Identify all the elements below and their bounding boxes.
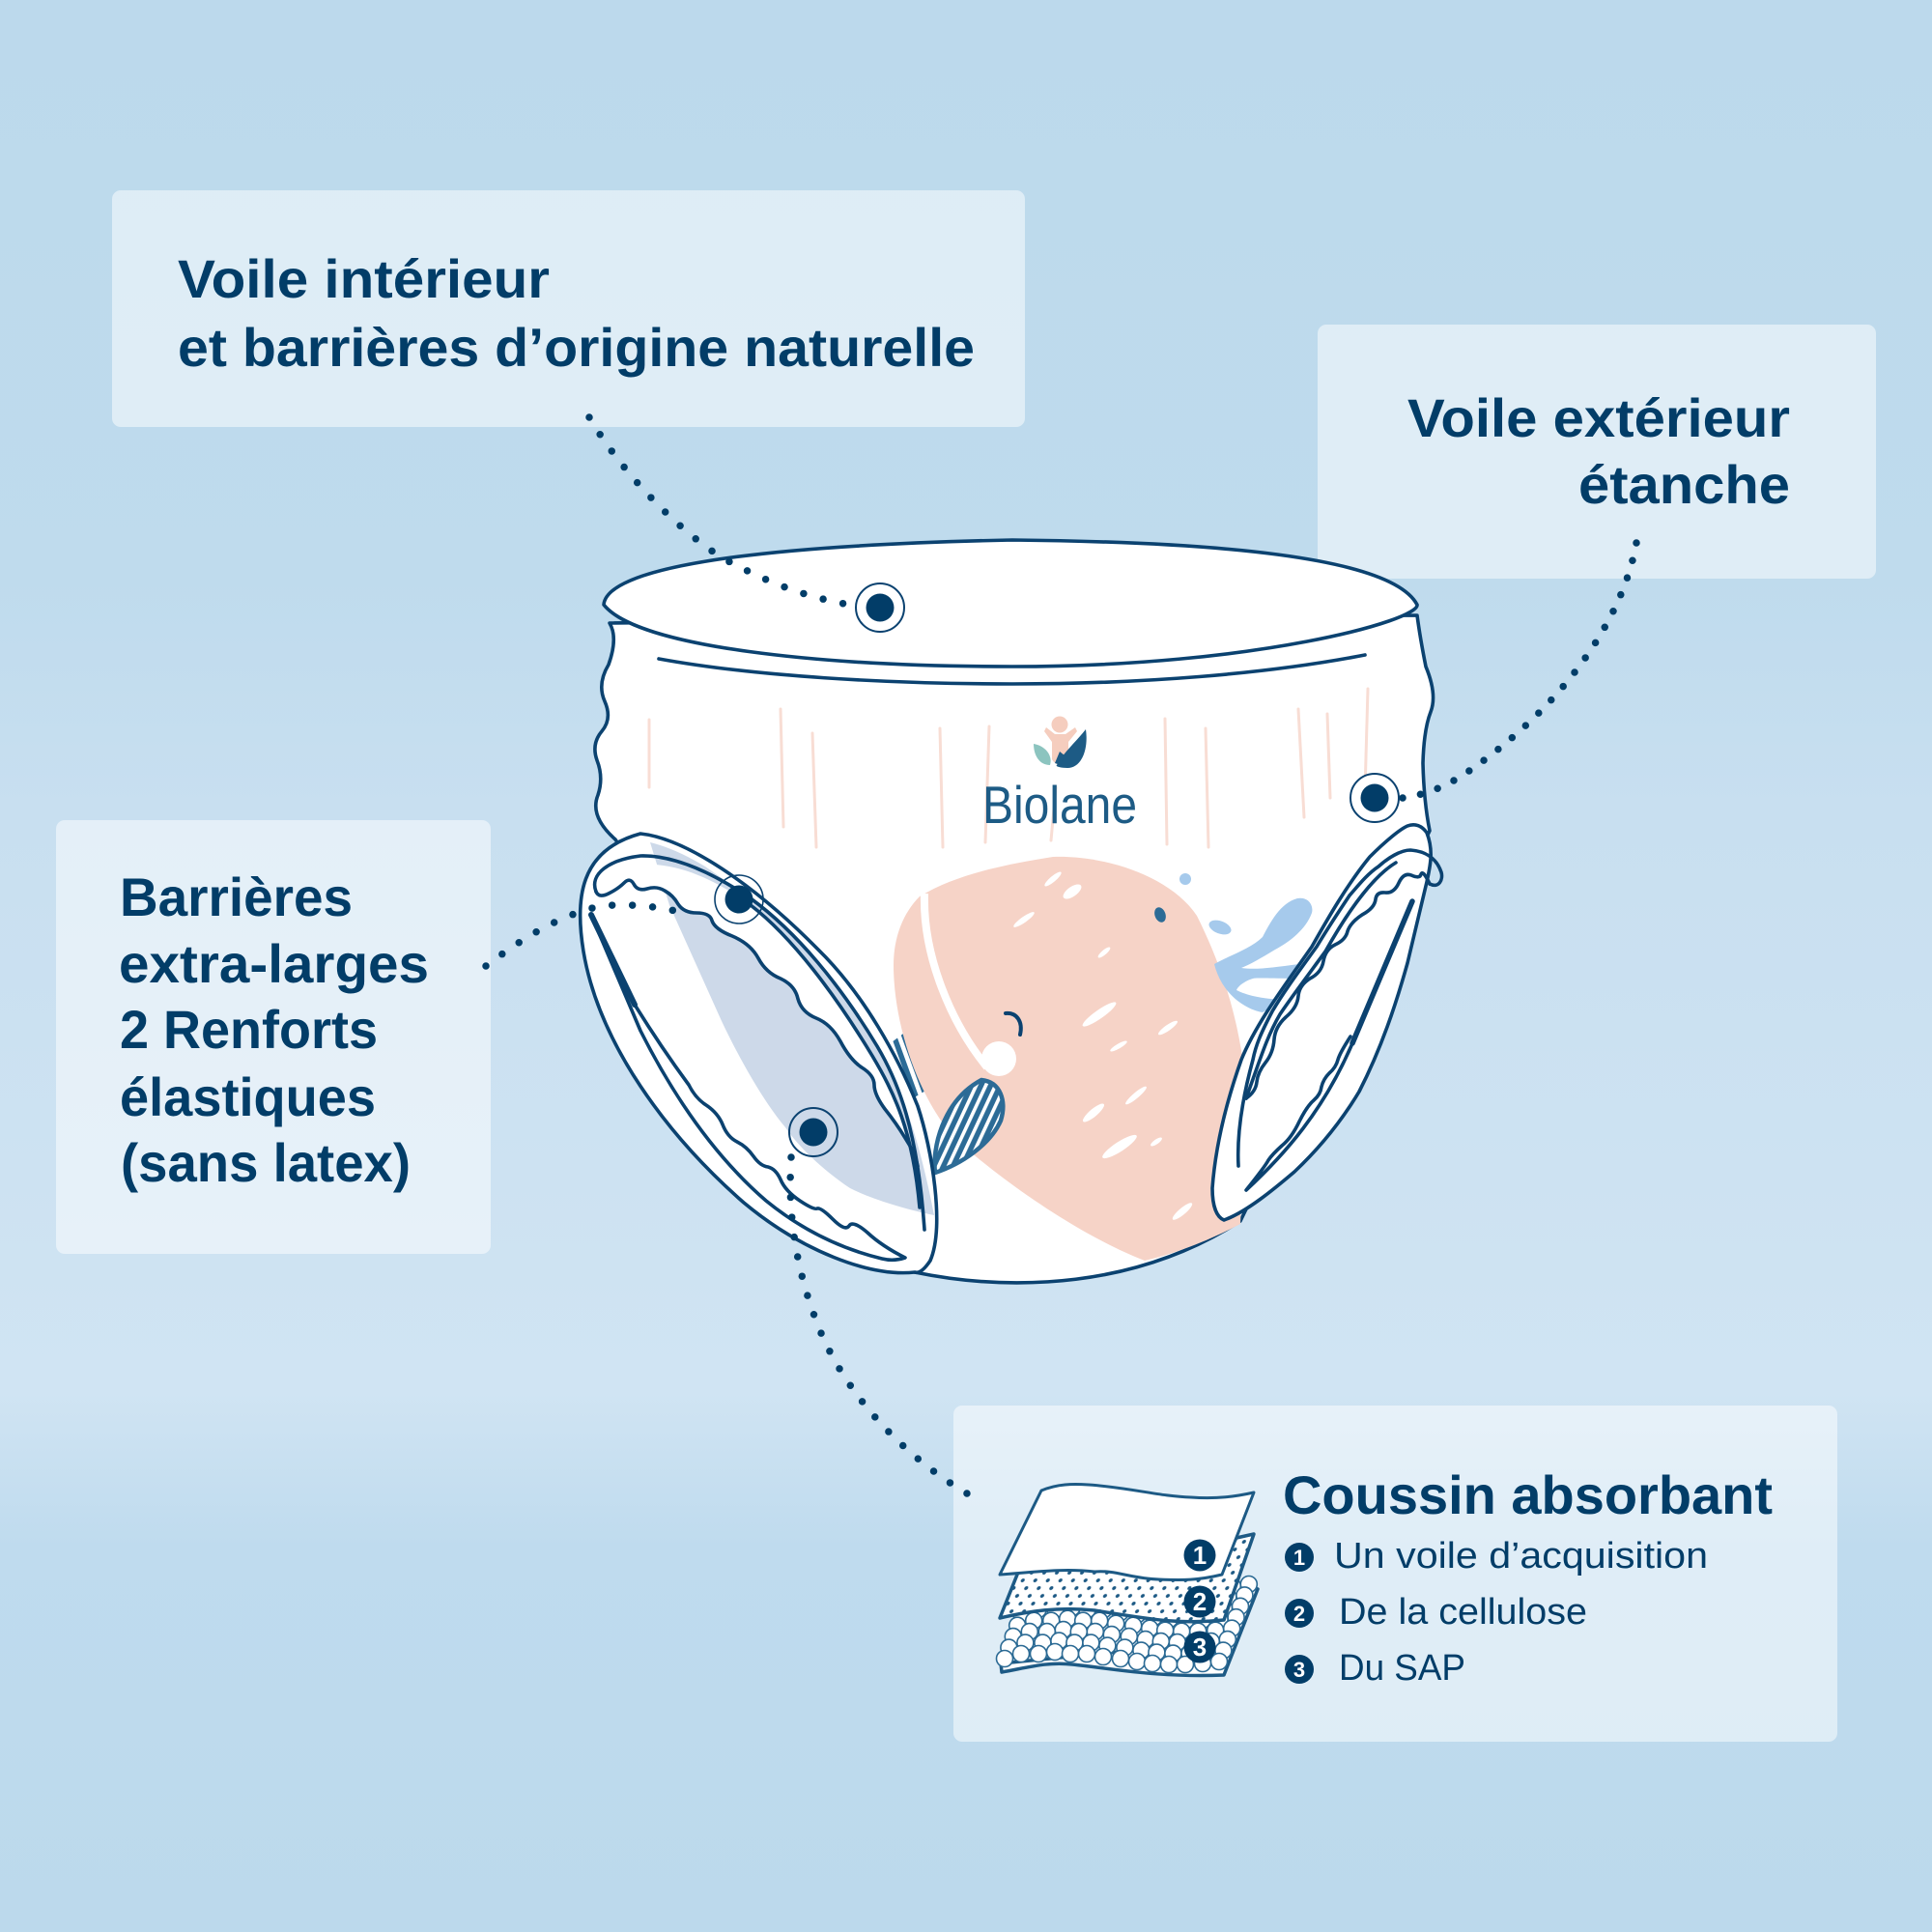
icon numbers — [1184, 1540, 1215, 1663]
right flap lower wave — [1352, 901, 1412, 1043]
marker: inner veil — [856, 583, 904, 632]
marker: barriers — [715, 875, 763, 923]
panel: coussin absorbant — [953, 1406, 1837, 1742]
logo baby — [1034, 717, 1087, 768]
heading: barrières: Barrières — [120, 867, 353, 927]
right leg flap — [1212, 825, 1441, 1220]
diaper illustration — [581, 540, 1441, 1283]
heading: voile intérieur: Voile intérieur — [178, 248, 550, 309]
dotted leader: outer veil — [1403, 543, 1636, 798]
list item 2: De la cellulose — [1339, 1592, 1587, 1633]
layer 1: acquisition — [1000, 1485, 1254, 1579]
icon numbers: 3 — [1193, 1633, 1207, 1662]
right flap hook line — [1238, 850, 1441, 1166]
list item 1: Un voile d’acquisition — [1334, 1536, 1708, 1577]
left leg flap — [581, 834, 937, 1273]
waist opening — [604, 540, 1417, 667]
panel: barrières — [56, 820, 491, 1254]
dotted leader: barriers — [486, 905, 684, 966]
left flap upper lines — [595, 856, 924, 1230]
whale front fin — [935, 1080, 1003, 1173]
list item 1: 1 — [1293, 1546, 1305, 1570]
heading: voile intérieur — [178, 248, 975, 378]
panel: voile intérieur — [112, 190, 1025, 427]
logo wordmark: Biolane — [982, 775, 1137, 835]
heading: barrières — [119, 867, 429, 1193]
heading: voile intérieur: et barrières d’origine naturelle — [178, 317, 975, 378]
list item 3: 3 — [1293, 1658, 1305, 1682]
list item 3 — [1285, 1648, 1465, 1689]
waist band line — [659, 655, 1365, 684]
diaper body — [595, 615, 1434, 1283]
icon numbers: 2 — [1193, 1587, 1207, 1616]
whale — [884, 857, 1246, 1261]
icon numbers: 1 — [1193, 1541, 1207, 1570]
whale highlights — [1012, 870, 1194, 1222]
icon: absorbent layers — [997, 1485, 1258, 1676]
list item 3: Du SAP — [1339, 1648, 1465, 1689]
heading: barrières: (sans latex) — [121, 1132, 411, 1193]
gathers — [649, 689, 1368, 847]
logo: biolane — [982, 717, 1137, 835]
heading: coussin absorbant: Coussin absorbant — [1283, 1464, 1773, 1525]
left flap white band — [638, 865, 918, 1166]
heading: barrières: élastiques — [120, 1066, 376, 1127]
left flap lower wave — [591, 915, 905, 1260]
layer 3: SAP — [997, 1567, 1258, 1676]
whale eye — [981, 906, 1168, 1076]
left flap shading — [650, 842, 934, 1215]
heading: voile extérieur: étanche — [1578, 454, 1790, 515]
left flap upper wave — [596, 880, 918, 1166]
dotted leader: inner veil — [589, 417, 856, 606]
dotted leader: absorbent core — [790, 1157, 967, 1493]
list item 2: 2 — [1293, 1602, 1305, 1626]
panel: voile extérieur — [1318, 325, 1876, 579]
heading: barrières: extra-larges — [119, 933, 429, 994]
marker: outer veil — [1350, 774, 1399, 822]
heading: voile extérieur: Voile extérieur — [1407, 387, 1790, 448]
right flap upper wave — [1246, 873, 1430, 1098]
whale crease — [924, 894, 987, 1067]
marker: absorbent core — [789, 1108, 838, 1156]
water splash — [1179, 873, 1312, 1012]
whale back fin — [884, 1034, 932, 1101]
heading: barrières: 2 Renforts — [120, 999, 378, 1060]
heading: voile extérieur — [1407, 387, 1790, 515]
layer 2: cellulose — [1000, 1534, 1254, 1622]
